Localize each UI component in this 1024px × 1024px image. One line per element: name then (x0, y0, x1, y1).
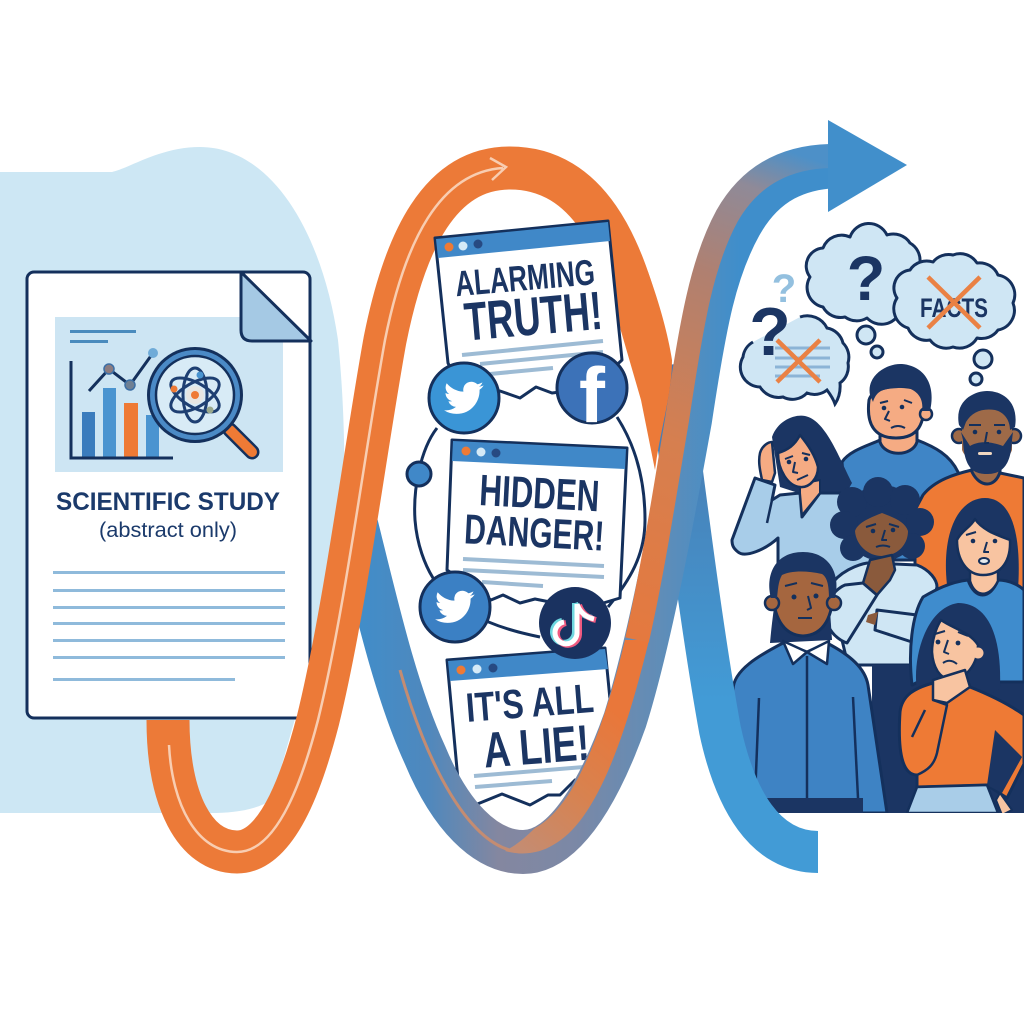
headline (453, 251, 605, 353)
panel: browser article one (435, 221, 622, 398)
chart panel (55, 317, 283, 472)
document corner fold (241, 272, 311, 341)
headline (463, 465, 608, 560)
confused question marks (749, 267, 796, 370)
person: woman in orange sweater (899, 603, 1024, 815)
icon: tiktok (539, 587, 611, 659)
arrow: descending blue ribbon (668, 365, 818, 852)
article text lines (463, 559, 604, 586)
person: man in blue jacket (733, 552, 887, 814)
headline: IT'S ALL (464, 675, 595, 731)
network ring (407, 417, 645, 637)
icon: twitter bird top (429, 363, 499, 433)
thought bubble: question mark: ? (847, 244, 885, 314)
headline: A LIE! (481, 714, 591, 779)
ribbon highlight line with chevron (169, 158, 506, 852)
headline: TRUTH! (462, 281, 605, 353)
article text lines (474, 766, 596, 787)
headline: HIDDEN (478, 466, 601, 521)
bar chart (71, 348, 173, 458)
document subtitle: (abstract only) (99, 519, 237, 542)
window header bar (436, 222, 610, 258)
window header bar (448, 649, 608, 681)
icon: magnifying glass with atom (147, 347, 252, 452)
headline (464, 675, 599, 780)
headline: DANGER! (463, 505, 605, 560)
arrow: second ribbon to outcome (355, 120, 907, 853)
thought bubble: question mark (806, 224, 920, 324)
person: man in blue shirt (842, 364, 970, 560)
thought dot small pair centre (857, 326, 883, 358)
thin stripe (400, 670, 523, 852)
abstract text lines (53, 571, 285, 681)
panel: scientific study document (27, 272, 311, 718)
headline: ALARMING (453, 251, 596, 304)
icon: facebook: f (579, 351, 606, 439)
arrow head (828, 120, 907, 212)
confused question marks: ? (749, 294, 791, 370)
ring node (407, 462, 431, 486)
background blob (0, 147, 344, 813)
icon: facebook (557, 351, 627, 439)
icon: twitter bird bottom (420, 572, 490, 642)
thought bubble: text crossed out (740, 316, 849, 404)
confused question marks: ? (772, 267, 796, 311)
person: woman with hand on head (730, 416, 870, 577)
person: woman with long hair (910, 498, 1024, 815)
person: bearded man in orange shirt (914, 391, 1024, 588)
infographic canvas (0, 120, 1024, 874)
window header bar (452, 441, 626, 469)
thought dots right (970, 350, 992, 385)
group of confused people (732, 364, 1024, 815)
orange overlay stripe (637, 156, 830, 640)
article text lines (462, 341, 603, 374)
lower orange taper (505, 640, 649, 853)
panel: browser article three (447, 648, 613, 805)
thought bubble: facts crossed out: FACTS (920, 293, 988, 323)
thought bubble: facts crossed out (894, 254, 1015, 348)
document title: SCIENTIFIC STUDY (56, 488, 280, 516)
panel: browser article two (447, 440, 627, 604)
person: woman with curly hair (825, 477, 937, 815)
arrow: orange ribbon (168, 158, 672, 852)
